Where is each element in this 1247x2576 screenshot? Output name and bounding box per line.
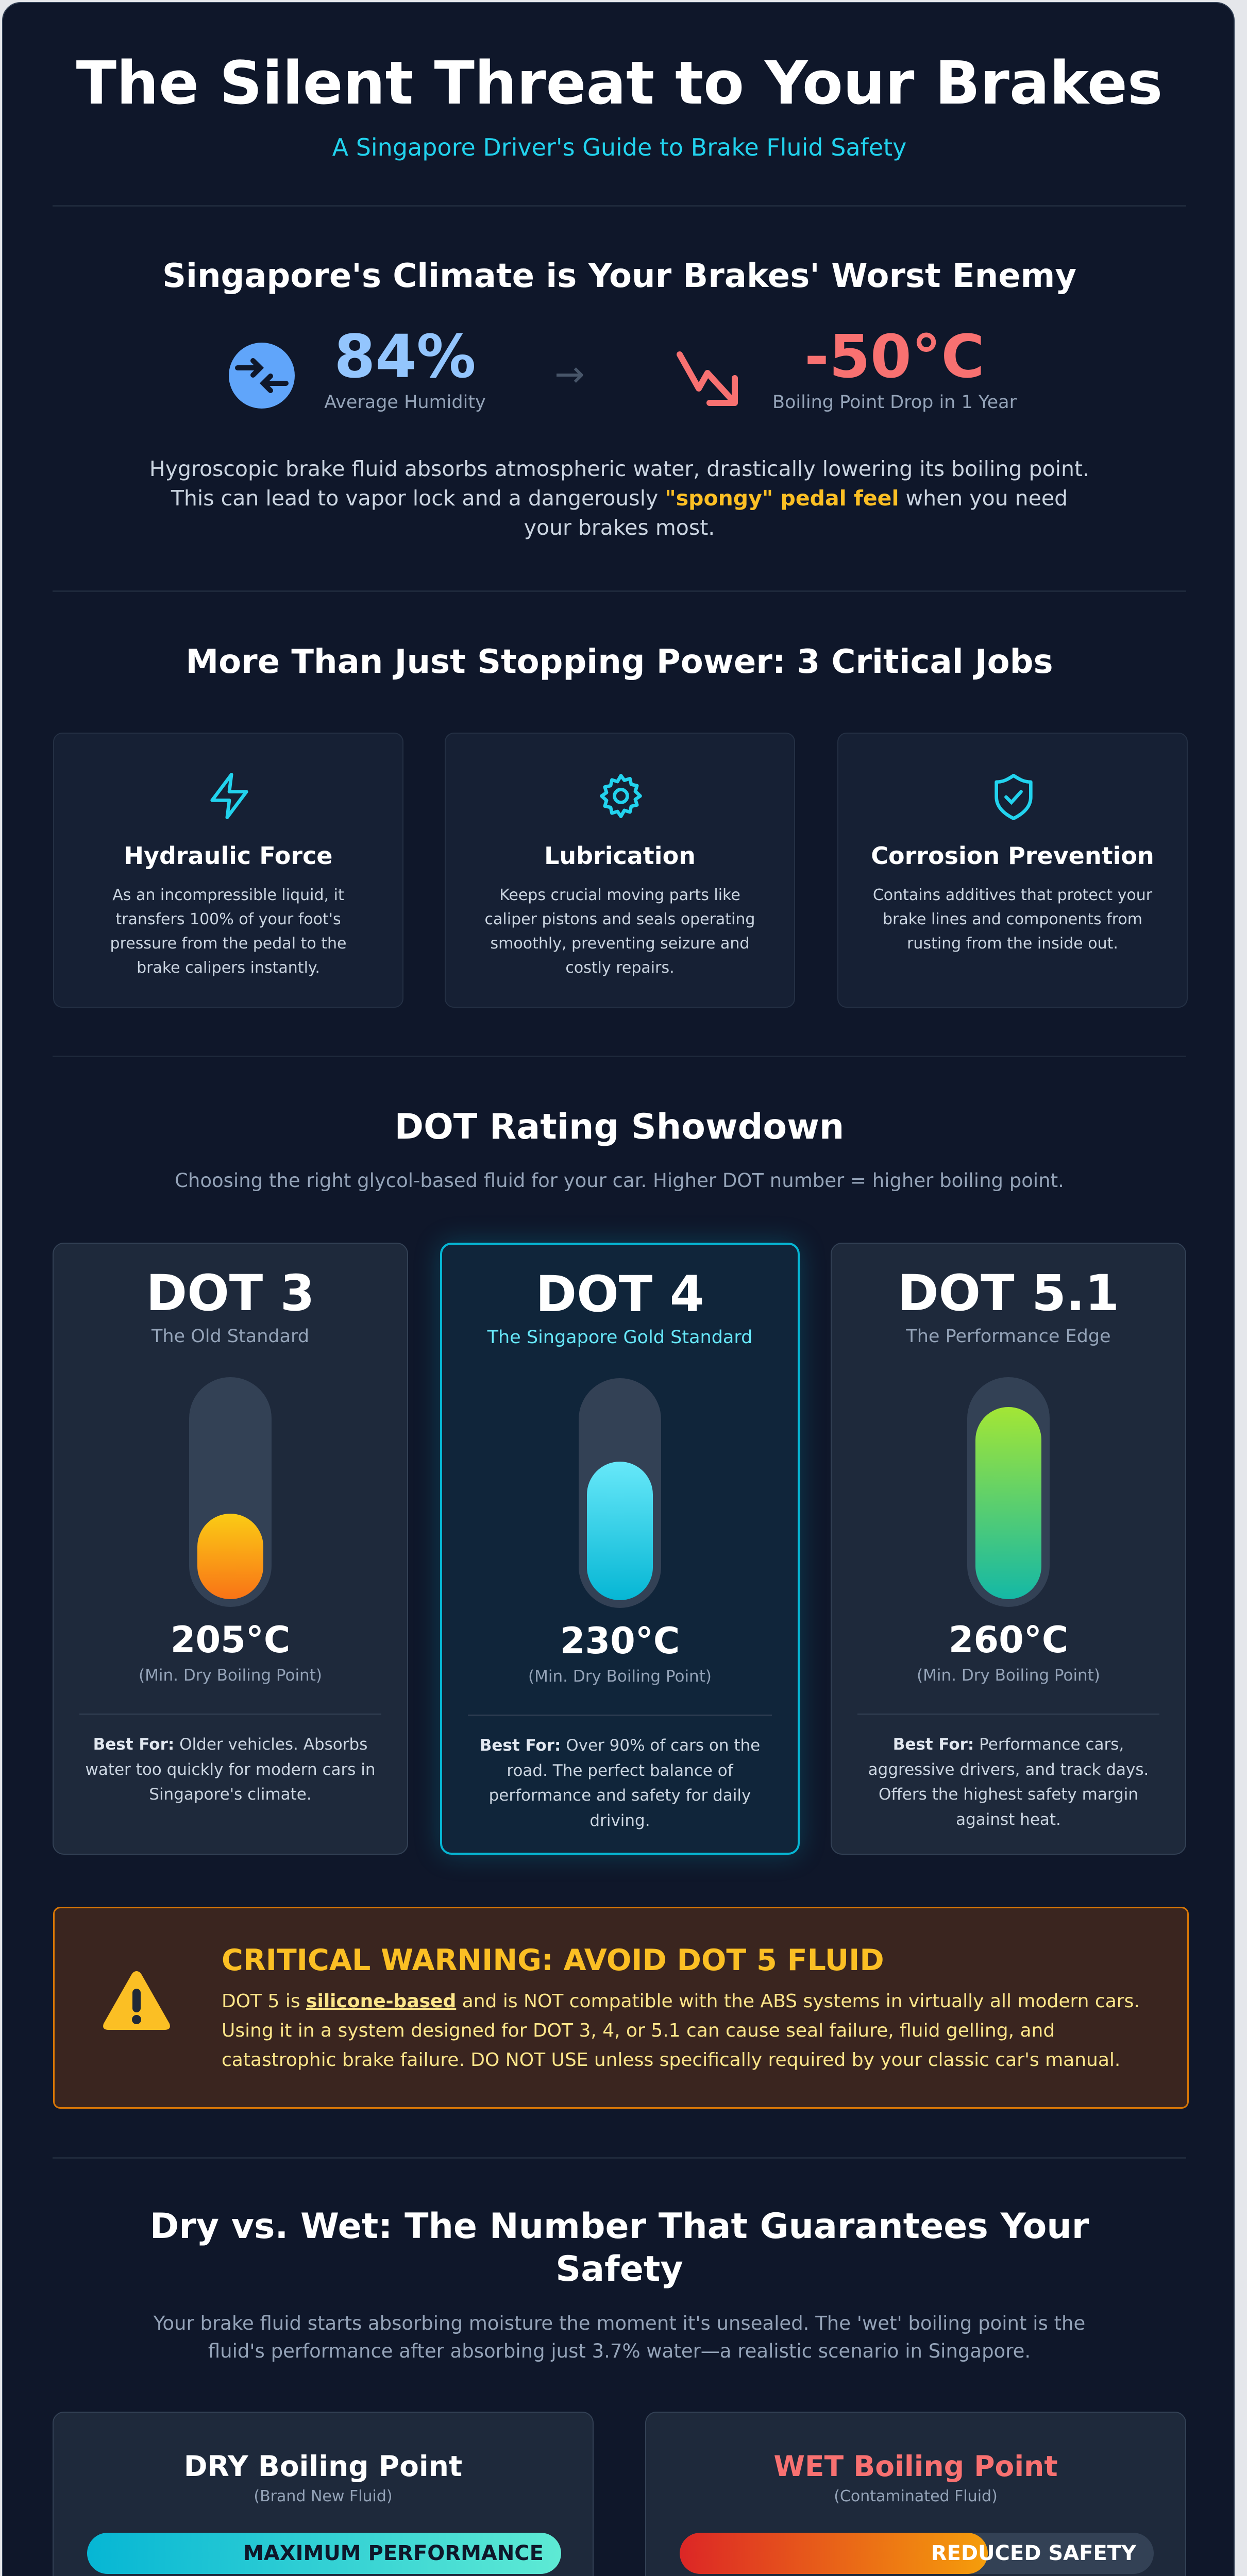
panel: corrosion prevention: rusting from the inside out. [907, 935, 1118, 953]
stat: 84%: 84% [334, 323, 476, 392]
heading: dry vs wet: Dry vs. Wet: The Number That Guarantees Your [150, 2206, 1089, 2247]
panel: lubrication: smoothly, preventing seizure and [491, 935, 749, 953]
icon: gear [600, 774, 642, 818]
heading: dry vs wet: Safety [555, 2249, 683, 2290]
panel: DOT 3: Best For: Older vehicles. Absorbs [93, 1735, 367, 1754]
icon: humidity circle [229, 343, 295, 409]
panel: dry boiling point: (Brand New Fluid) [254, 2487, 393, 2505]
thermometer: DOT 4 [579, 1378, 661, 1608]
panel: corrosion prevention [837, 733, 1188, 1008]
panel: DOT 5.1: The Performance Edge [906, 1326, 1111, 1347]
panel: DOT 5.1: aggressive drivers, and track days. [868, 1760, 1149, 1778]
panel: DOT 3: DOT 3 [146, 1264, 314, 1322]
bar: reduced safety: REDUCED SAFETY [931, 2541, 1136, 2565]
warning text: DOT 5 is silicone-based and is NOT compatible with the ABS systems in virtually all modern cars. [222, 1991, 1140, 2012]
panel: DOT 3: The Old Standard [151, 1326, 309, 1347]
title: The Silent Threat to Your Brakes [76, 49, 1162, 118]
warning text: Using it in a system designed for DOT 3, 4, or 5.1 can cause seal failure, fluid gelling, and [222, 2020, 1055, 2041]
panel: DOT 4 [440, 1243, 800, 1855]
paragraph: hygroscopic [149, 456, 1089, 540]
warning title: CRITICAL WARNING: AVOID DOT 5 FLUID [222, 1943, 884, 1977]
panel: DOT 5.1: Best For: Performance cars, [893, 1735, 1124, 1754]
heading: climate: Singapore's Climate is Your Brakes' Worst Enemy [162, 257, 1076, 295]
icon: warning triangle [103, 1971, 170, 2030]
stat: -50C: -50°C [804, 323, 985, 392]
panel: lubrication: caliper pistons and seals operating [485, 910, 755, 928]
panel: lubrication [445, 733, 795, 1008]
arrow: → [554, 353, 585, 395]
panel: wet boiling point: WET Boiling Point [773, 2450, 1058, 2483]
bar: max performance: MAXIMUM PERFORMANCE [243, 2541, 544, 2565]
panel: corrosion prevention: Contains additives that protect your [873, 886, 1152, 904]
panel: DOT 5.1 [831, 1243, 1186, 1855]
paragraph: hygroscopic: your brakes most. [524, 515, 715, 540]
panel: DOT 4: road. The perfect balance of [507, 1761, 733, 1780]
heading: DOT showdown: DOT Rating Showdown [395, 1107, 844, 1147]
panel: wet boiling point [645, 2412, 1186, 2576]
subtitle: A Singapore Driver's Guide to Brake Fluid Safety [332, 133, 906, 161]
stat: 84% [324, 323, 486, 413]
panel: DOT 3: water too quickly for modern cars in [85, 1760, 375, 1778]
warning text [222, 1991, 1140, 2071]
panel: DOT 4: The Singapore Gold Standard [487, 1327, 752, 1348]
warning text: catastrophic brake failure. DO NOT USE unless specifically required by your classic car's manual. [222, 2049, 1120, 2071]
panel: DOT 3 [53, 1243, 408, 1855]
panel: DOT 4: DOT 4 [536, 1265, 704, 1323]
stat: -50C [772, 323, 1017, 413]
panel: lubrication: Lubrication [544, 842, 696, 870]
panel: DOT 5.1: (Min. Dry Boiling Point) [917, 1666, 1100, 1685]
panel: DOT 4: Best For: Over 90% of cars on the [480, 1736, 760, 1755]
panel: DOT 5.1: DOT 5.1 [898, 1264, 1119, 1322]
icon: lightning [210, 773, 248, 819]
bar: max performance [87, 2533, 561, 2574]
stat: 84%: Average Humidity [324, 392, 486, 413]
bar: reduced safety [680, 2533, 1154, 2574]
panel: corrosion prevention: brake lines and components from [883, 910, 1142, 928]
panel: DOT 3: (Min. Dry Boiling Point) [139, 1666, 322, 1685]
panel: DOT 5.1: Offers the highest safety margin [879, 1785, 1138, 1804]
panel: hydraulic force: brake calipers instantly. [137, 959, 320, 977]
paragraph: hygroscopic: This can lead to vapor lock and a dangerously "spongy" pedal feel when you need [171, 486, 1068, 511]
subtitle: dry vs wet: fluid's performance after absorbing just 3.7% water—a realistic scenario in Singapore. [208, 2340, 1031, 2362]
panel: hydraulic force: Hydraulic Force [124, 842, 333, 870]
panel: dry boiling point [53, 2412, 594, 2576]
panel: hydraulic force: pressure from the pedal to the [110, 935, 346, 953]
panel: DOT 3: 205°C [171, 1619, 290, 1661]
panel: hydraulic force [53, 733, 403, 1008]
panel: DOT 3: Singapore's climate. [149, 1785, 312, 1804]
paragraph: hygroscopic: Hygroscopic brake fluid absorbs atmospheric water, drastically lowering its boiling point. [149, 456, 1089, 481]
thermometer: DOT 3 [189, 1377, 272, 1607]
panel: DOT 5.1: against heat. [956, 1810, 1061, 1829]
panel: corrosion prevention: Corrosion Prevention [871, 842, 1154, 870]
subtitle: DOT: Choosing the right glycol-based fluid for your car. Higher DOT number = higher boiling point. [175, 1170, 1064, 1192]
stat: -50C: Boiling Point Drop in 1 Year [772, 392, 1017, 413]
panel: lubrication: costly repairs. [565, 959, 675, 977]
panel: wet boiling point: (Contaminated Fluid) [834, 2487, 998, 2505]
panel: hydraulic force: transfers 100% of your foot's [115, 910, 341, 928]
panel: DOT 4: performance and safety for daily [489, 1786, 751, 1805]
icon: shield check [995, 774, 1033, 820]
panel: DOT 4: 230°C [560, 1620, 680, 1662]
icon: trending down [677, 351, 738, 406]
panel: DOT 4: driving. [589, 1811, 650, 1830]
panel: hydraulic force: As an incompressible liquid, it [112, 886, 344, 904]
thermometer: DOT 5.1 [967, 1377, 1050, 1607]
subtitle: dry vs wet [154, 2312, 1085, 2362]
subtitle: dry vs wet: Your brake fluid starts absorbing moisture the moment it's unsealed. The 'wet' boiling point is the [154, 2312, 1085, 2334]
heading: 3 jobs: More Than Just Stopping Power: 3 Critical Jobs [186, 643, 1053, 681]
stats row [229, 323, 1017, 413]
heading: dry vs wet [150, 2206, 1089, 2290]
panel: lubrication: Keeps crucial moving parts like [499, 886, 740, 904]
panel: DOT 4: (Min. Dry Boiling Point) [528, 1667, 712, 1686]
callout: DOT 5 warning [53, 1907, 1189, 2109]
panel: DOT 5.1: 260°C [949, 1619, 1068, 1661]
panel: dry boiling point: DRY Boiling Point [184, 2450, 462, 2483]
